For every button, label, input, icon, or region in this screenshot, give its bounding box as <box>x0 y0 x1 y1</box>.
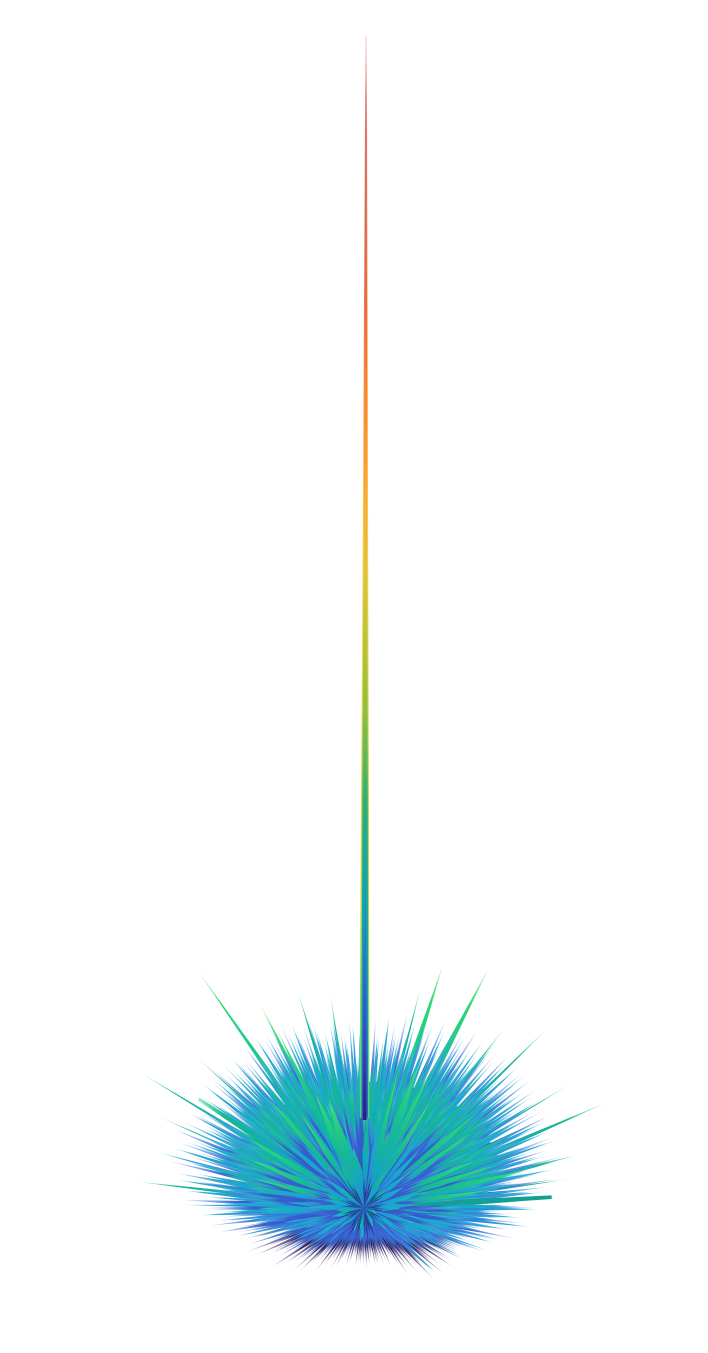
teal layer over the upper half <box>202 1036 531 1239</box>
royal blue layer, all around <box>165 1010 570 1265</box>
green highlight spikes <box>247 1029 530 1211</box>
dark purple spikes along the underside <box>237 1184 475 1284</box>
blue outliers <box>157 1151 501 1273</box>
blunt-tipped teal spikes <box>197 1097 552 1211</box>
cyan streaks woven over the blue <box>248 1094 488 1239</box>
short cyan spikes at the centre <box>299 1165 432 1246</box>
dense core of the burst <box>240 1082 500 1236</box>
dark gaps at the centre <box>334 1172 390 1245</box>
central green spikes <box>321 1114 394 1228</box>
long outlier spikes reaching past the burst <box>138 964 606 1273</box>
teal and cyan outliers <box>138 987 606 1210</box>
right blunt spike <box>364 1194 552 1211</box>
short blue spikes at the centre <box>293 1155 441 1244</box>
darker blue streaks woven over the teal <box>219 1077 497 1233</box>
centre of the burst <box>293 1114 441 1246</box>
cyan layer <box>187 1018 546 1246</box>
stem: tall tapered spike <box>360 36 369 1120</box>
stem outer edge <box>360 36 369 1118</box>
stem mid band <box>361 36 368 1118</box>
left blunt spike <box>197 1097 365 1210</box>
green outliers <box>195 964 492 1210</box>
stem dark core <box>363 780 366 1120</box>
mid blue layer <box>170 1009 567 1261</box>
